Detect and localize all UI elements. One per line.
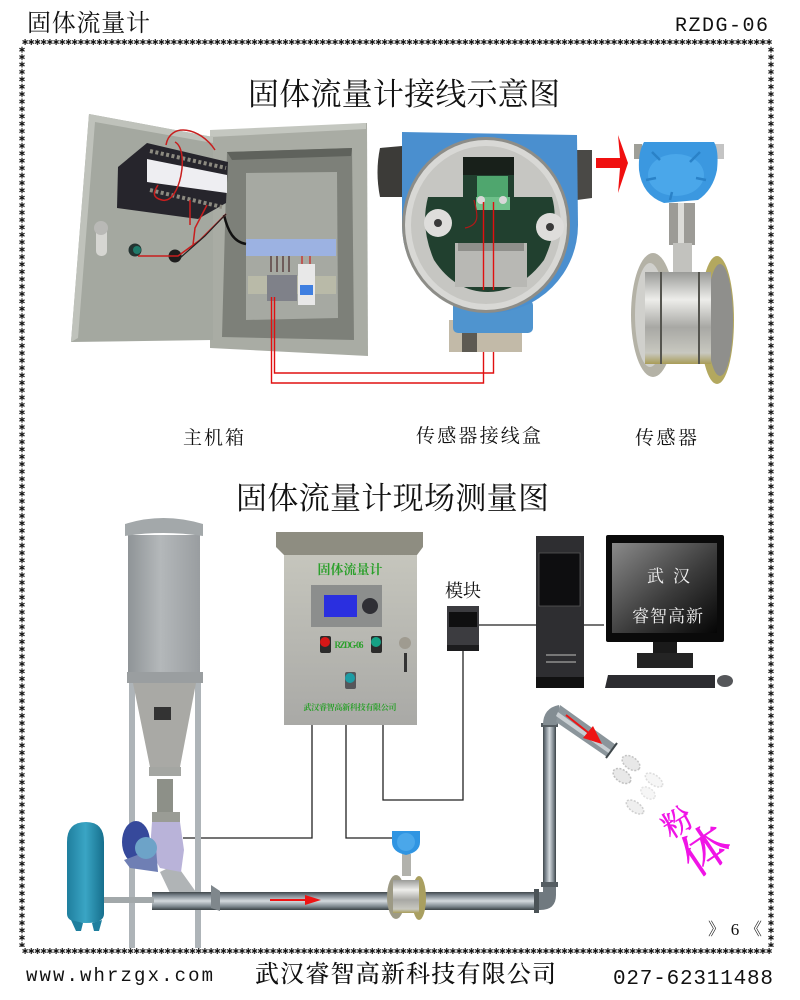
y fitting: [160, 864, 196, 893]
mounting plate: [246, 172, 338, 320]
red jumper: [465, 200, 477, 228]
instrument module: [117, 143, 228, 219]
powder particles: [610, 752, 665, 817]
powder label: [657, 801, 741, 887]
cone: [133, 683, 196, 767]
angled discharge pipe: [556, 705, 616, 757]
flow meter on pipe: [387, 831, 426, 920]
neck and stem: [449, 320, 522, 352]
support legs: [129, 683, 135, 948]
mounting lugs: [424, 209, 452, 237]
casing ring: [402, 137, 570, 313]
silo band: [127, 672, 203, 683]
header title: 固体流量计: [27, 10, 150, 37]
cabinet body: [210, 123, 368, 356]
main conveying pipe: [218, 705, 617, 913]
screen text: 武汉: [647, 567, 690, 586]
rotary valve: [150, 822, 184, 872]
vertical pipe: [543, 725, 556, 885]
open door: [71, 114, 213, 342]
display panel: [311, 585, 382, 627]
photo: host cabinet: [71, 114, 368, 356]
company text: 武汉睿智高新科技有限公司: [304, 702, 396, 712]
door lock: [96, 222, 107, 256]
computer tower: [536, 536, 584, 688]
din rail and breakers: [248, 276, 336, 294]
io module: [447, 606, 479, 651]
blue converter head: [639, 142, 718, 203]
monitor stand: [653, 642, 677, 654]
metal shield: [455, 243, 527, 287]
footer phone: 027-62311488: [613, 968, 773, 991]
label: junction box: 传感器接线盒: [416, 424, 541, 447]
red arrow: [596, 135, 628, 193]
blower motor: [122, 821, 158, 872]
blue cable duct: [246, 239, 336, 256]
keyboard and mouse: [605, 675, 733, 688]
stem: [669, 203, 695, 245]
blue housing: [402, 132, 578, 313]
silo cap: [125, 518, 203, 536]
label: module: 模块: [445, 581, 481, 601]
horizontal pipe: [218, 892, 538, 910]
cabinet roof: [276, 532, 423, 555]
door indicators: [128, 244, 142, 256]
model number: RZDG-06: [675, 15, 768, 38]
page number: 》6《: [708, 920, 762, 939]
wires to duct: [271, 256, 289, 272]
left flange: [631, 253, 675, 377]
green button: [371, 636, 382, 653]
feeder neck: [157, 779, 173, 813]
terminal rows: [150, 151, 226, 207]
signal wires over box: [484, 202, 494, 290]
powder label: 体: [672, 816, 741, 887]
cable glands: [378, 146, 402, 197]
label: host cabinet: 主机箱: [183, 427, 244, 449]
top elbow: [543, 705, 561, 725]
photo: sensor junction box: [378, 132, 592, 352]
cabinet title: 固体流量计: [317, 562, 383, 577]
flow arrow lower: [270, 895, 321, 905]
door wiring: [138, 130, 226, 256]
red signal wires: [272, 202, 494, 383]
flow arrow upper: [566, 715, 602, 744]
model text: RZDG-06: [334, 640, 364, 650]
signal cables: [183, 625, 604, 838]
right flange: [700, 256, 734, 384]
control cabinet: [276, 532, 423, 725]
heading: field measurement diagram: 固体流量计现场测量图: [236, 481, 549, 516]
air feed pipe: [104, 897, 154, 903]
photo: flow sensor: [631, 142, 734, 384]
air receiver tank: [67, 822, 104, 923]
footer website: www.whrzgx.com: [26, 965, 213, 987]
powder label: 粉: [657, 801, 699, 845]
converter bolts: [634, 144, 642, 159]
silo cylinder: [128, 535, 200, 673]
hopper and feeder: [67, 518, 220, 948]
lower elbow: [538, 885, 556, 910]
circuit board: [425, 157, 555, 292]
lower button: [345, 672, 356, 689]
footer company name: 武汉睿智高新科技有限公司: [255, 961, 556, 988]
cabinet lock: [399, 637, 411, 672]
screen text: 睿智高新: [632, 607, 703, 626]
computer monitor: [606, 535, 724, 668]
meter body: [645, 272, 711, 364]
label: sensor: 传感器: [635, 426, 697, 449]
green terminal: [477, 176, 508, 210]
heading: wiring diagram: 固体流量计接线示意图: [248, 77, 560, 112]
red button: [320, 636, 331, 653]
cabinet body: [284, 552, 417, 725]
